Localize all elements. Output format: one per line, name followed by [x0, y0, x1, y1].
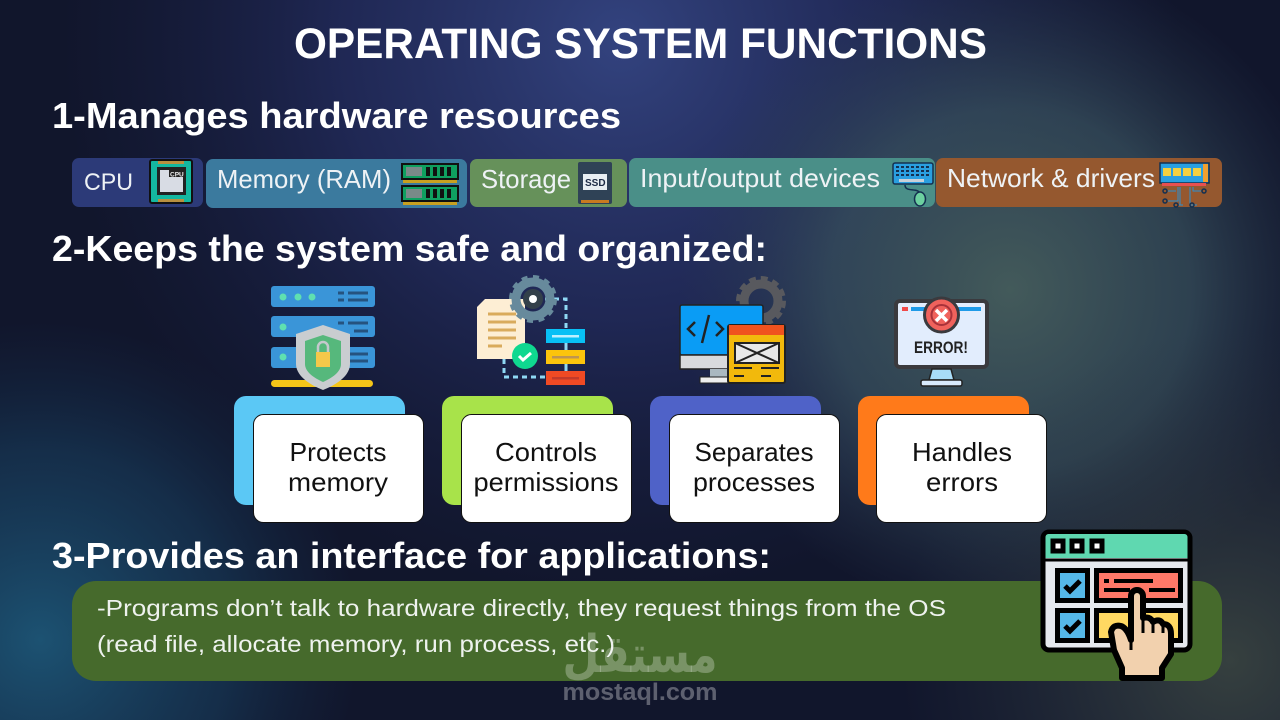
- card: controls permissions: [442, 396, 632, 522]
- icon: application interface with pointing hand: [1043, 532, 1190, 678]
- chip: input/output: [629, 158, 935, 207]
- panel: hardware resource chips: [72, 158, 1222, 208]
- chip: storage: Storage: [481, 164, 571, 194]
- icon: network switch: [1160, 163, 1209, 207]
- panel: interface explanation: [72, 581, 1222, 681]
- icon: SSD: SSD: [585, 178, 606, 189]
- card: handles errors: [858, 396, 1046, 522]
- chip: CPU: [72, 158, 203, 207]
- card: protects memory: [234, 396, 424, 522]
- heading: safe and organized: 2-Keeps the system safe and organized:: [52, 228, 767, 269]
- icon: permissions flow: [477, 277, 585, 385]
- icon: CPU chip: CPU: [170, 172, 184, 178]
- watermark: [562, 625, 718, 706]
- icon: SSD: [578, 162, 612, 204]
- card: protects memory: Protects: [290, 437, 386, 467]
- card: handles errors: errors: [926, 467, 998, 497]
- icon: error monitor: ERROR!: [914, 338, 968, 357]
- title: OPERATING SYSTEM FUNCTIONS: [294, 20, 987, 68]
- icon: RAM sticks: [402, 164, 458, 205]
- card: controls permissions: Controls: [495, 437, 597, 467]
- icon: error monitor: [896, 298, 987, 386]
- chip: input/output: Input/output devices: [640, 163, 880, 193]
- card: separates processes: [650, 396, 840, 522]
- panel: interface explanation: -Programs don’t talk to hardware directly, they request things from the OS: [97, 595, 946, 621]
- card: handles errors: Handles: [912, 437, 1012, 467]
- icon: keyboard and mouse: [893, 163, 933, 206]
- card: separates processes: Separates: [694, 437, 814, 467]
- card: separates processes: processes: [693, 467, 815, 497]
- chip: network: [936, 158, 1222, 207]
- watermark: مستقل: [562, 625, 718, 685]
- heading: manages hardware resources: 1-Manages hardware resources: [52, 95, 621, 136]
- panel: interface explanation: (read file, allocate memory, run process, etc.): [97, 631, 615, 657]
- chip: CPU: CPU: [84, 169, 133, 196]
- heading: interface for applications: 3-Provides an interface for applications:: [52, 535, 771, 576]
- chip: network: Network & drivers: [947, 163, 1155, 193]
- chip: memory: [206, 159, 467, 208]
- icon: server shield: [271, 286, 375, 390]
- card: controls permissions: permissions: [474, 467, 618, 497]
- icon: separate windows: [680, 278, 785, 383]
- chip: memory: Memory (RAM): [217, 164, 391, 194]
- card: protects memory: memory: [288, 467, 388, 497]
- watermark: mostaql.com: [562, 679, 718, 706]
- chip: storage: [470, 159, 627, 207]
